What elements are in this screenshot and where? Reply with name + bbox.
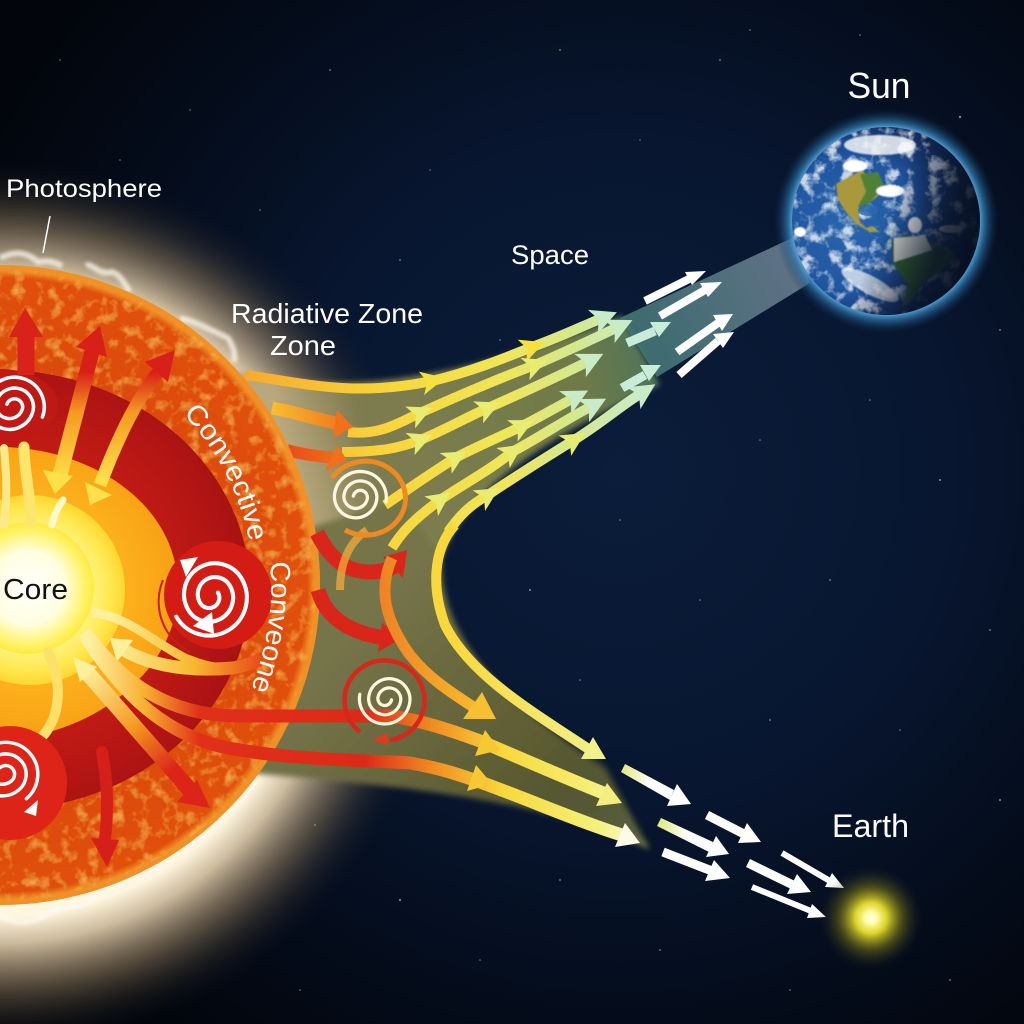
night side shading xyxy=(852,135,980,315)
arrow xyxy=(621,764,691,806)
arrow xyxy=(679,332,734,375)
red arrow right B xyxy=(318,590,402,652)
stream 1 xyxy=(245,319,600,389)
swirl: large red xyxy=(159,541,272,652)
pale short arrow B xyxy=(622,365,661,388)
yellow halo xyxy=(0,495,125,685)
curved label: Convective: Convective xyxy=(188,406,263,540)
label: Core: Core xyxy=(3,574,68,606)
dark red zone xyxy=(0,370,250,810)
white core xyxy=(0,522,94,654)
swirl: lower left xyxy=(0,726,67,840)
arrow xyxy=(657,818,729,857)
photosphere wisps xyxy=(0,253,330,922)
line from core xyxy=(92,612,232,668)
outer rim xyxy=(0,267,318,903)
stream 5 xyxy=(392,407,590,548)
stream 6 xyxy=(448,394,640,532)
arrow xyxy=(645,271,706,301)
swirl: red ring in stream xyxy=(344,660,424,745)
radial convection arrows xyxy=(9,308,260,867)
cloud texture xyxy=(790,125,985,320)
label: Radiative Zone: Radiative Zone xyxy=(231,298,423,329)
label: Zone: Zone xyxy=(270,330,336,361)
arrow xyxy=(707,815,761,843)
arrow xyxy=(660,282,722,316)
orange stream down xyxy=(385,558,496,719)
arrow: straight up xyxy=(9,308,43,375)
arrow xyxy=(663,852,730,881)
arrow xyxy=(782,853,844,888)
planet globe xyxy=(774,109,998,333)
curved stream from swirl xyxy=(340,530,367,590)
lower white arrows xyxy=(621,764,844,918)
stream inner curve down xyxy=(436,525,606,759)
red arrow right A xyxy=(317,533,407,578)
small yellow star xyxy=(819,866,923,970)
arrow: double up-right xyxy=(85,350,175,505)
arrow: double up-left xyxy=(43,326,107,494)
upper white arrows xyxy=(645,271,734,375)
long lower stream 1 xyxy=(85,632,640,847)
solar disc xyxy=(0,265,320,905)
arrow: lower vertical xyxy=(91,752,119,867)
short orange arrow upper xyxy=(272,408,353,438)
energy band behind the arrows xyxy=(200,316,660,850)
gulf ocean xyxy=(858,204,878,216)
swirl: upper left xyxy=(0,369,58,441)
stream 3 xyxy=(342,362,587,452)
light beam to planet xyxy=(620,238,810,377)
label: Photosphere: Photosphere xyxy=(6,175,162,203)
upper energy streams xyxy=(245,319,640,548)
continents xyxy=(836,170,955,308)
arrow xyxy=(677,314,733,352)
pale short arrow A xyxy=(627,322,671,343)
bright clouds xyxy=(794,135,963,308)
arrow: return to core xyxy=(110,638,260,669)
radiative orange zone xyxy=(0,447,178,740)
curved label: Conveone: Conveone xyxy=(252,562,290,692)
arrow: core to lower right xyxy=(73,657,210,808)
pointer line xyxy=(43,216,50,253)
swirl: orange in stream xyxy=(331,461,405,535)
label: Space: Space xyxy=(511,240,589,270)
arrow xyxy=(748,863,811,894)
inner flow lines near core xyxy=(4,447,63,737)
stream 2 xyxy=(348,328,616,433)
short red-orange arrow xyxy=(287,445,347,472)
label: Sun: Sun xyxy=(848,65,910,106)
sun outer glow xyxy=(0,160,445,1024)
stream 4 xyxy=(385,399,572,505)
arrow xyxy=(752,887,826,918)
long lower stream 2 xyxy=(85,636,622,835)
outer convective layer xyxy=(0,265,320,905)
label: Earth: Earth xyxy=(832,808,909,844)
